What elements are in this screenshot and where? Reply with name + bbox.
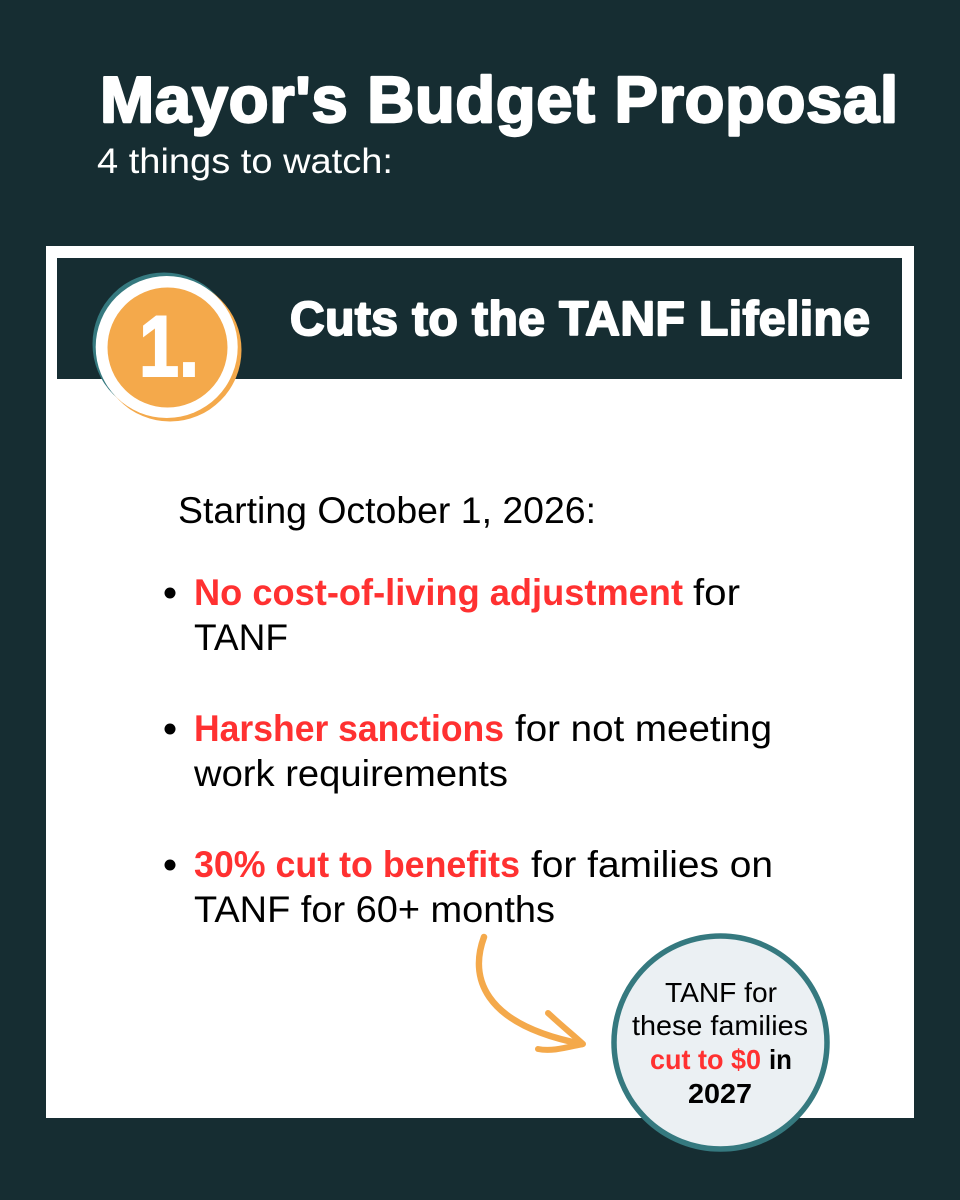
panel: heading band — [57, 258, 902, 379]
bullet 2 — [164, 708, 772, 794]
callout: circle — [614, 936, 827, 1149]
title: Mayor's Budget Proposal — [100, 63, 898, 136]
callout: circle: 2027 — [688, 1078, 752, 1109]
bullet 1: No cost-of-living adjustment — [194, 572, 683, 613]
arrow — [479, 937, 583, 1050]
badge number: 1. — [139, 299, 199, 395]
bullet 3 — [164, 844, 773, 930]
callout: circle: in — [769, 1044, 792, 1075]
bullet 2: Harsher sanctions — [194, 708, 504, 749]
bullet 2: work requirements — [193, 753, 508, 794]
text: intro line: Starting October 1, 2026: — [178, 490, 596, 531]
subtitle: 4 things to watch: — [97, 142, 393, 181]
panel: white card — [46, 246, 914, 1118]
icon: number badge — [92, 272, 242, 422]
callout: circle: TANF for — [665, 977, 777, 1008]
bullet 1 — [164, 572, 740, 658]
bullet 3: for families on — [531, 844, 773, 885]
bullet 1: TANF — [194, 617, 288, 658]
bullet 3: TANF for 60+ months — [194, 889, 555, 930]
bullet 2: for not meeting — [515, 708, 772, 749]
callout: circle: cut to $0 — [650, 1044, 761, 1075]
heading: Cuts to the TANF Lifeline — [290, 293, 870, 346]
bullet 1: for — [693, 572, 740, 613]
bullet 3: 30% cut to benefits — [194, 844, 520, 885]
callout: circle: these families — [632, 1010, 808, 1041]
